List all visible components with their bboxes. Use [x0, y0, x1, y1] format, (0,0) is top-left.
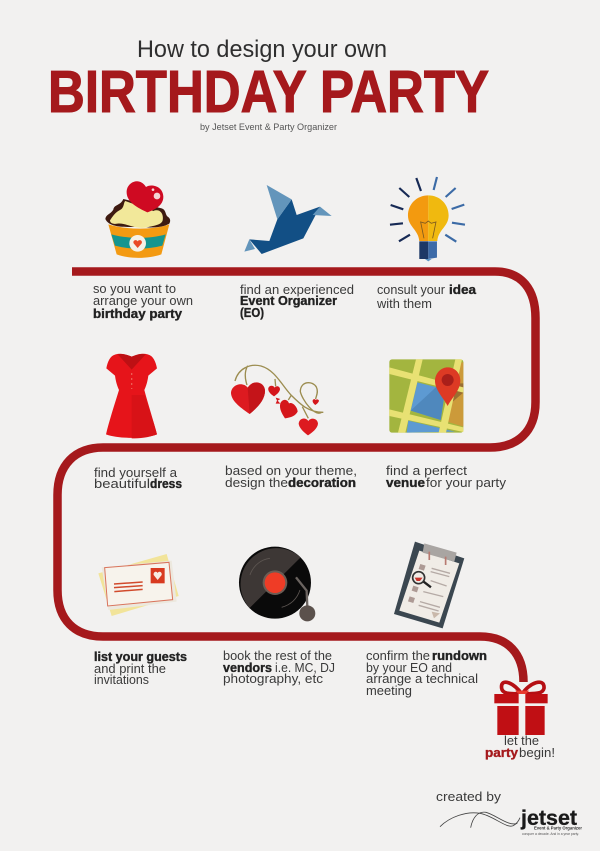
text: step 2: Event Organizer: [240, 294, 337, 308]
text: step 7: list your guests: [94, 650, 187, 664]
text: step 9: arrange a technical: [366, 672, 478, 686]
text: step 1: so you want to: [93, 282, 176, 296]
text: step 8: photography, etc: [223, 672, 323, 686]
text: step 8: i.e. MC, DJ: [275, 661, 335, 675]
text: step 4: beautiful: [94, 477, 150, 491]
text: let the party begin: [485, 734, 555, 760]
text: step 7: and print the: [94, 662, 166, 676]
icon: light bulb: [390, 177, 465, 261]
text: step 2: (EO): [240, 306, 264, 320]
icon: gift box: [494, 682, 548, 735]
icon: envelopes: [98, 554, 179, 616]
icon: origami bird: [244, 185, 332, 254]
icon: red dress: [106, 354, 157, 438]
text: let the party begin: party: [485, 746, 518, 760]
text: step 6: venue: [386, 476, 425, 490]
text: step 8: [223, 649, 335, 686]
icon: map with pin: [389, 359, 463, 433]
text: let the party begin: begin!: [519, 746, 555, 760]
text: step 1: arrange your own: [93, 294, 193, 308]
text: step 9: by your EO and: [366, 661, 452, 675]
text: step 5: [225, 464, 357, 490]
icon: clipboard checklist: [394, 542, 464, 628]
text: step 8: vendors: [223, 661, 272, 675]
text: step 9: [366, 649, 487, 698]
text: step 4: find yourself a: [94, 466, 177, 480]
text: step 7: invitations: [94, 673, 149, 687]
text: step 2: find an experienced: [240, 283, 354, 297]
text: step 5: design the: [225, 476, 288, 490]
text: created by: created by: [436, 790, 502, 804]
logo: jetset: [440, 807, 582, 836]
logo: jetset: jetset: [520, 807, 577, 830]
icon: heart vine decoration: [231, 365, 323, 435]
text: step 2: [240, 283, 354, 320]
text: step 5: based on your theme,: [225, 464, 357, 478]
text: step 3: idea: [449, 283, 477, 297]
text: step 6: [386, 464, 507, 490]
text: step 9: rundown: [432, 649, 487, 663]
title: how to design your own: How to design your own: [137, 36, 387, 63]
text: step 8: book the rest of the: [223, 649, 332, 663]
text: step 3: consult your: [377, 283, 445, 297]
logo: jetset: Event & Party Organizer: [534, 826, 582, 830]
text: step 7: [94, 650, 187, 687]
subtitle: by Jetset Event & Party Organizer: [200, 122, 337, 133]
text: step 6: find a perfect: [386, 464, 468, 478]
text: step 5: decoration: [288, 476, 356, 490]
icon: vinyl record: [239, 547, 315, 621]
icon: cupcake: [105, 181, 170, 258]
text: step 3: with them: [376, 297, 432, 311]
text: let the party begin: let the: [504, 734, 539, 748]
text: step 6: for your party: [426, 476, 507, 490]
logo: jetset: conquer a decade. And in a year party.: [522, 832, 579, 836]
text: step 1: [93, 282, 193, 321]
text: step 4: dress: [150, 477, 182, 491]
title: birthday party: BIRTHDAY PARTY: [48, 59, 489, 125]
winding timeline path: [58, 272, 536, 682]
text: step 9: confirm the: [366, 649, 430, 663]
text: step 1: birthday party: [93, 307, 182, 321]
text: step 4: [94, 466, 182, 491]
text: step 3: [376, 283, 477, 311]
text: step 9: meeting: [366, 684, 412, 698]
